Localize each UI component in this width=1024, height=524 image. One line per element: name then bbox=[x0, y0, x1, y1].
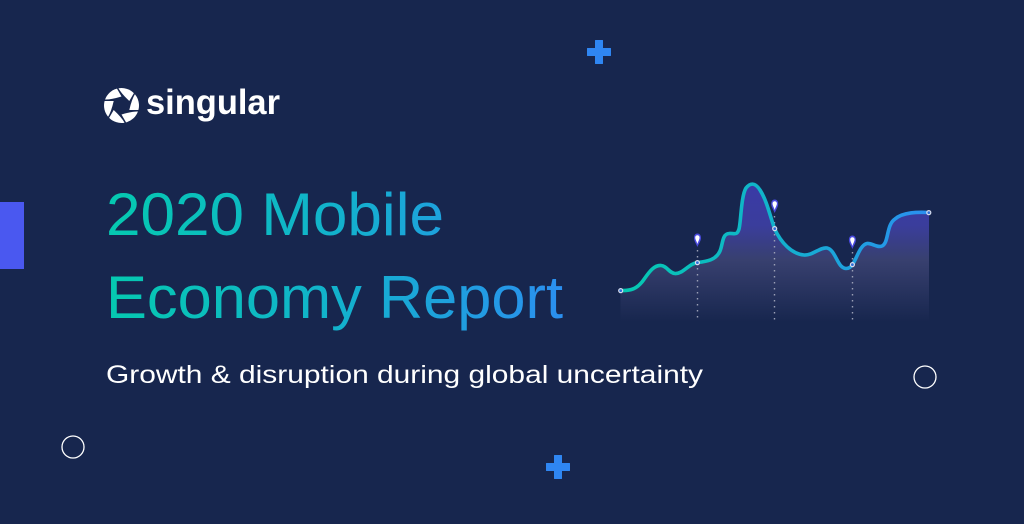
icon: circle right bbox=[914, 366, 936, 388]
marker dotted lines bbox=[698, 216, 852, 322]
icon: circle left bbox=[62, 436, 84, 458]
logo bbox=[100, 83, 280, 125]
chart area fill bbox=[620, 184, 929, 322]
icon: plus bottom bbox=[546, 456, 570, 478]
line chart bbox=[619, 184, 931, 322]
title line 1: 2020 Mobile bbox=[106, 181, 444, 248]
data points bbox=[619, 211, 931, 293]
subtitle: Growth & disruption during global uncertainty bbox=[106, 361, 704, 389]
map pins bbox=[694, 200, 856, 249]
icon: singular swirl bbox=[100, 86, 143, 125]
logo wordmark: singular bbox=[146, 83, 280, 122]
title line 2: Economy Report bbox=[106, 264, 563, 331]
accent bar bbox=[0, 202, 24, 269]
icon: plus top bbox=[588, 40, 610, 64]
chart line bbox=[620, 184, 929, 291]
